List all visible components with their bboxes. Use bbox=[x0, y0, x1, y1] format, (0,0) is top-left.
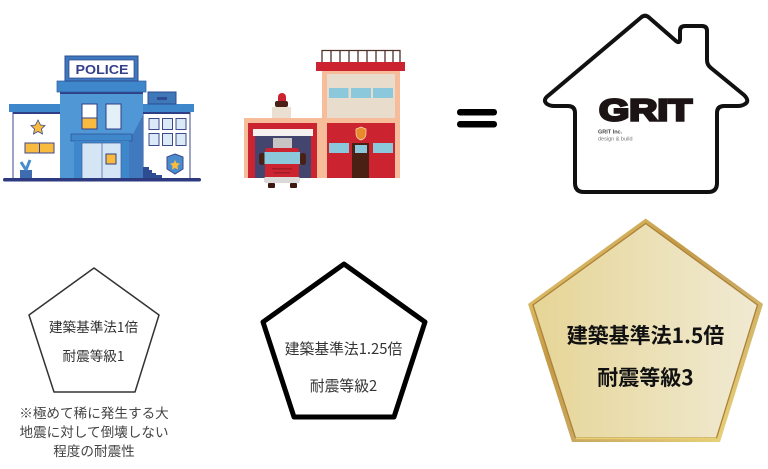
panel: seismic grade 3 gold bbox=[528, 218, 763, 442]
note text: 程度の耐震性 bbox=[53, 440, 135, 460]
logo caption: design & build bbox=[598, 136, 633, 142]
note text bbox=[19, 402, 169, 460]
note text: ※極めて稀に発生する大 bbox=[19, 402, 169, 422]
panel: seismic grade 1 bbox=[19, 268, 169, 460]
equals sign bbox=[457, 109, 497, 128]
panel: seismic grade 2: 耐震等級2 bbox=[310, 375, 377, 396]
icon: fire station bbox=[244, 50, 405, 188]
note text: 地震に対して倒壊しない bbox=[19, 421, 169, 441]
panel: seismic grade 1: 耐震等級1 bbox=[63, 345, 124, 365]
sign text: POLICE: POLICE bbox=[76, 63, 128, 77]
fire truck bbox=[259, 138, 306, 188]
icon: house outline with GRIT logo bbox=[545, 16, 747, 192]
panel: seismic grade 2: 建築基準法1.25倍 bbox=[285, 338, 402, 359]
logo caption bbox=[598, 130, 633, 142]
panel: seismic grade 1: 建築基準法1倍 bbox=[49, 316, 138, 336]
panel: seismic grade 3 gold: 建築基準法1.5倍 bbox=[567, 320, 724, 350]
logo wordmark: GRIT: GRIT bbox=[599, 92, 692, 128]
logo caption: GRIT Inc. bbox=[598, 130, 623, 136]
icon: police station bbox=[3, 56, 201, 182]
panel: seismic grade 3 gold: 耐震等級3 bbox=[597, 362, 694, 392]
panel: seismic grade 2 bbox=[263, 264, 425, 417]
